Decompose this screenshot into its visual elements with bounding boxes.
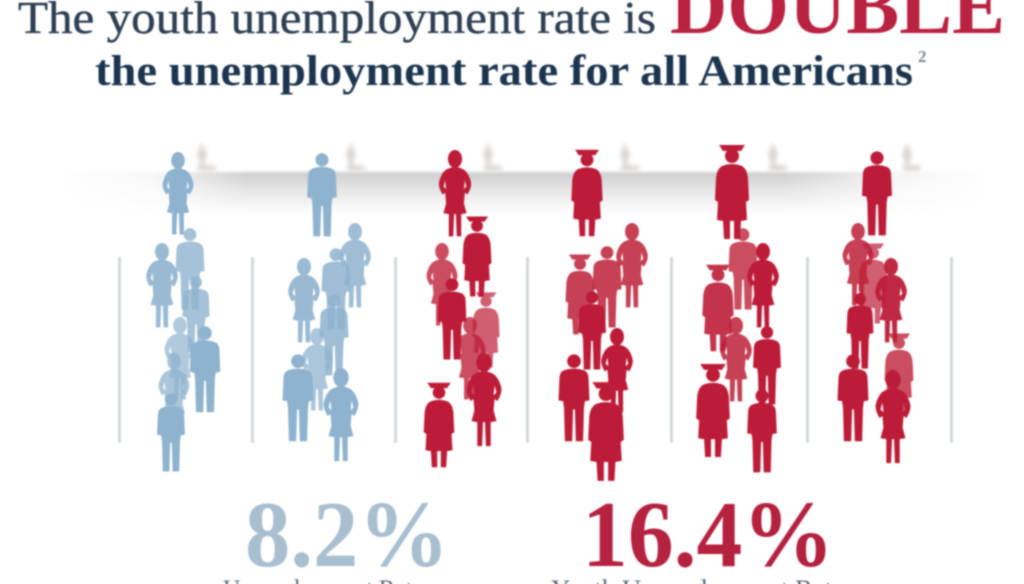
people group: column 1 blue bbox=[146, 152, 220, 472]
heading line two: the unemployment rate for all Americans bbox=[95, 48, 913, 95]
people group: column 5 red bbox=[696, 145, 781, 472]
statistic: youth rate: 16.4% bbox=[582, 483, 834, 584]
people group: column 6 red bbox=[838, 151, 913, 463]
title bbox=[18, 0, 1005, 95]
column dividers bbox=[118, 257, 953, 443]
ghost figures on the horizon bbox=[197, 144, 922, 171]
statistic: overall rate: 8.2% bbox=[245, 483, 449, 584]
people group: column 4 red bbox=[559, 150, 648, 481]
people group: column 2 blue bbox=[283, 153, 371, 461]
people group: column 3 red bbox=[424, 150, 501, 467]
floor shadow band bbox=[60, 170, 990, 216]
footnote marker: 2 bbox=[918, 47, 926, 66]
